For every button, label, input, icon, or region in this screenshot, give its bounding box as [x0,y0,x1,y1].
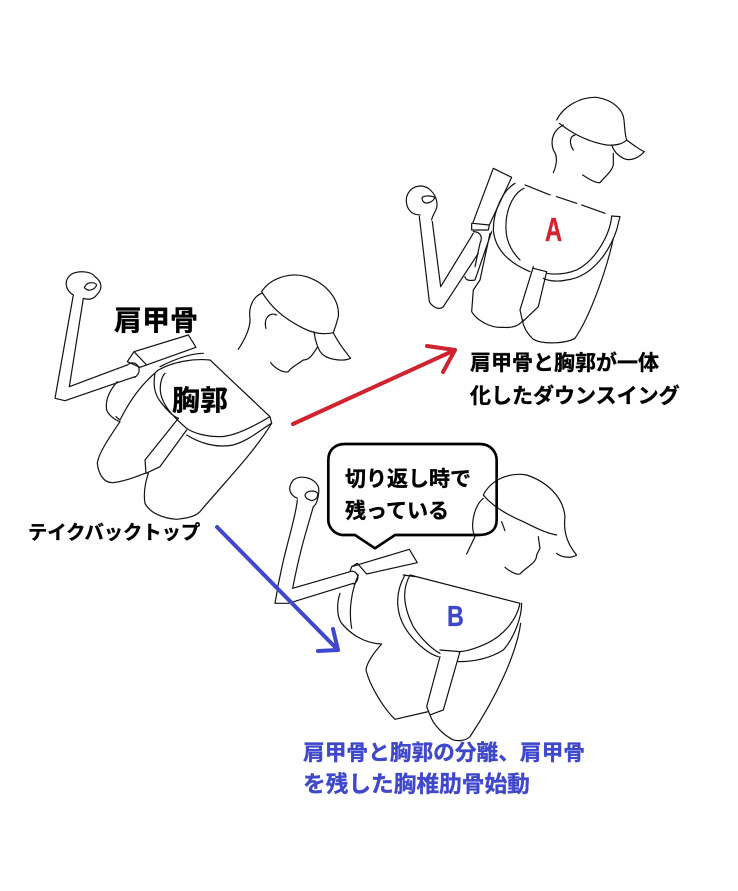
scapula box [350,549,417,574]
label: scapula: 肩甲骨 [114,305,198,336]
label: B: B [447,599,464,633]
strap and torso [338,575,521,741]
label: takeback top: テイクバックトップ [28,522,200,544]
scapula box [472,168,512,267]
speech bubble: 切り返し時で [345,468,471,491]
chest plate [493,183,620,281]
chest plate [398,575,522,662]
text: separated scapula and thorax: 肩甲骨と胸郭の分離、肩甲骨 [303,740,585,765]
speech bubble [328,444,497,548]
label: thorax: 胸郭 [172,385,228,416]
head and cap [238,275,351,372]
text: integrated downswing: 化したダウンスイング [470,384,680,408]
text: integrated downswing: 肩甲骨と胸郭が一体 [470,351,659,375]
strap and torso [97,370,272,519]
figure B: golfer with scapula left behind [275,474,577,741]
text: separated scapula and thorax [303,740,585,797]
head and cap [552,97,644,183]
text: separated scapula and thorax: を残した胸椎肋骨始動 [303,771,530,797]
scapula box [127,335,196,367]
figure A: golfer with scapula and thorax together [406,97,644,343]
figure: takeback top golfer [55,272,351,519]
strap and torso [465,232,613,343]
speech bubble: 残っている [345,499,449,523]
chest plate [154,353,272,446]
head and cap [467,474,577,574]
arm and fist [275,477,358,603]
blue arrow [217,527,338,651]
arm and fist [406,186,478,308]
red arrow [293,346,455,424]
label: A: A [545,212,562,249]
arm and fist [55,272,139,401]
text: integrated downswing [470,351,680,408]
